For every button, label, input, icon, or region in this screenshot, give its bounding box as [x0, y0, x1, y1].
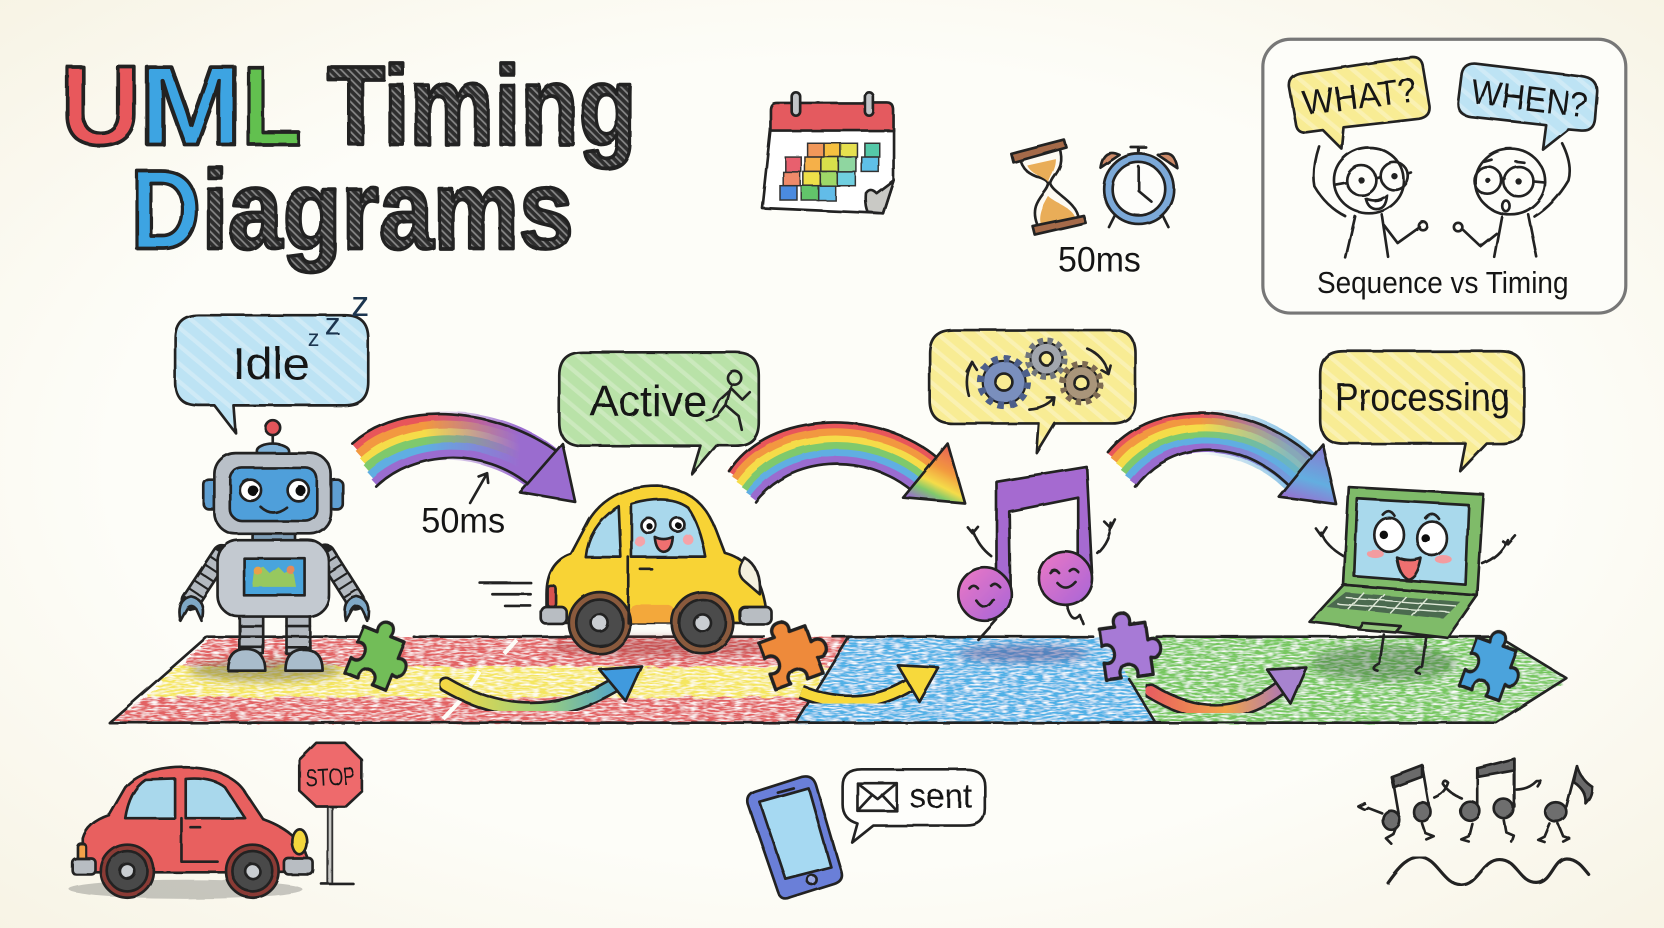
- rainbow arrow: processing to done: [1108, 413, 1336, 504]
- floor: blue section: [796, 638, 1157, 723]
- red car: [69, 767, 313, 899]
- label: 50ms duration: 50ms: [1058, 241, 1141, 280]
- arrow and label: 50ms: 50ms: [421, 502, 505, 541]
- calendar cells: [780, 143, 880, 200]
- floor arrow: red-purple: [1150, 667, 1306, 712]
- title: U: [60, 42, 141, 168]
- callout: idle: z: [308, 325, 319, 351]
- timeline floor: [109, 637, 1566, 723]
- icon: runner: [707, 371, 750, 430]
- robot: [179, 420, 369, 671]
- shadow: robot: [189, 660, 342, 681]
- figure: when person: [1454, 143, 1570, 257]
- speed lines: [480, 583, 531, 606]
- callout: idle: Idle: [232, 340, 310, 389]
- stop sign: [299, 743, 362, 884]
- robot arms: [179, 554, 369, 621]
- icon: gears: [967, 341, 1111, 410]
- callout: sent: sent: [909, 778, 973, 816]
- floor: green section: [1104, 638, 1566, 723]
- puzzle: purple: [1097, 608, 1164, 680]
- callout: idle: z: [351, 283, 369, 324]
- puzzle: green: [345, 615, 419, 694]
- shadow: car: [547, 638, 769, 657]
- callout: processing gears: [930, 330, 1136, 453]
- title: iagrams: [202, 146, 573, 272]
- laptop face: [1367, 511, 1452, 579]
- callout: processing: [1320, 351, 1524, 471]
- phone: [748, 776, 842, 899]
- floor: idle section: [111, 638, 854, 723]
- robot legs: [228, 615, 323, 671]
- callout: what: WHAT?: [1300, 70, 1419, 123]
- title: Timing: [327, 42, 637, 168]
- callout: when: WHEN?: [1469, 72, 1590, 125]
- label: sequence vs timing: Sequence vs Timing: [1317, 265, 1568, 300]
- callout: processing: Processing: [1335, 376, 1510, 420]
- puzzle: orange: [755, 610, 834, 690]
- callout: active: [559, 352, 759, 474]
- callout: active: Active: [590, 378, 707, 426]
- callout: idle: z: [325, 305, 341, 341]
- callout: sent: [843, 769, 985, 843]
- icon: calendar: [762, 92, 894, 213]
- robot body: [218, 531, 329, 617]
- icon: hourglass: [1011, 140, 1086, 235]
- callout: idle: [175, 283, 369, 433]
- floor arrow: yellow: [801, 665, 938, 702]
- icon: envelope: [857, 783, 897, 811]
- floor arrow: rainbow-blue: [446, 666, 642, 710]
- puzzle: blue: [1459, 625, 1531, 704]
- callout: when: [1458, 64, 1597, 150]
- floor dividers: [109, 637, 1566, 723]
- figure: what person: [1314, 146, 1427, 258]
- panel: sequence vs timing: [1263, 39, 1626, 313]
- shadow: laptop: [1312, 645, 1456, 681]
- laptop character: [1310, 487, 1515, 674]
- yellow car: [480, 486, 772, 654]
- stop sign: STOP: [305, 763, 356, 793]
- small dancing notes: [1358, 759, 1592, 844]
- shadow: notes: [957, 645, 1089, 662]
- title: M: [139, 42, 243, 168]
- arrow and label: 50ms: [421, 473, 505, 541]
- rainbow arrow: active to processing: [729, 422, 965, 503]
- robot head: [204, 453, 343, 534]
- callout: what: [1289, 57, 1430, 149]
- icon: alarm clock: [1100, 148, 1177, 227]
- music notes character: [958, 467, 1115, 640]
- title: L: [242, 42, 301, 168]
- car face: [635, 517, 693, 552]
- rainbow arrow: idle to active: [352, 414, 575, 502]
- title: D: [131, 146, 201, 272]
- title: [60, 42, 637, 272]
- wave line: [1388, 857, 1589, 885]
